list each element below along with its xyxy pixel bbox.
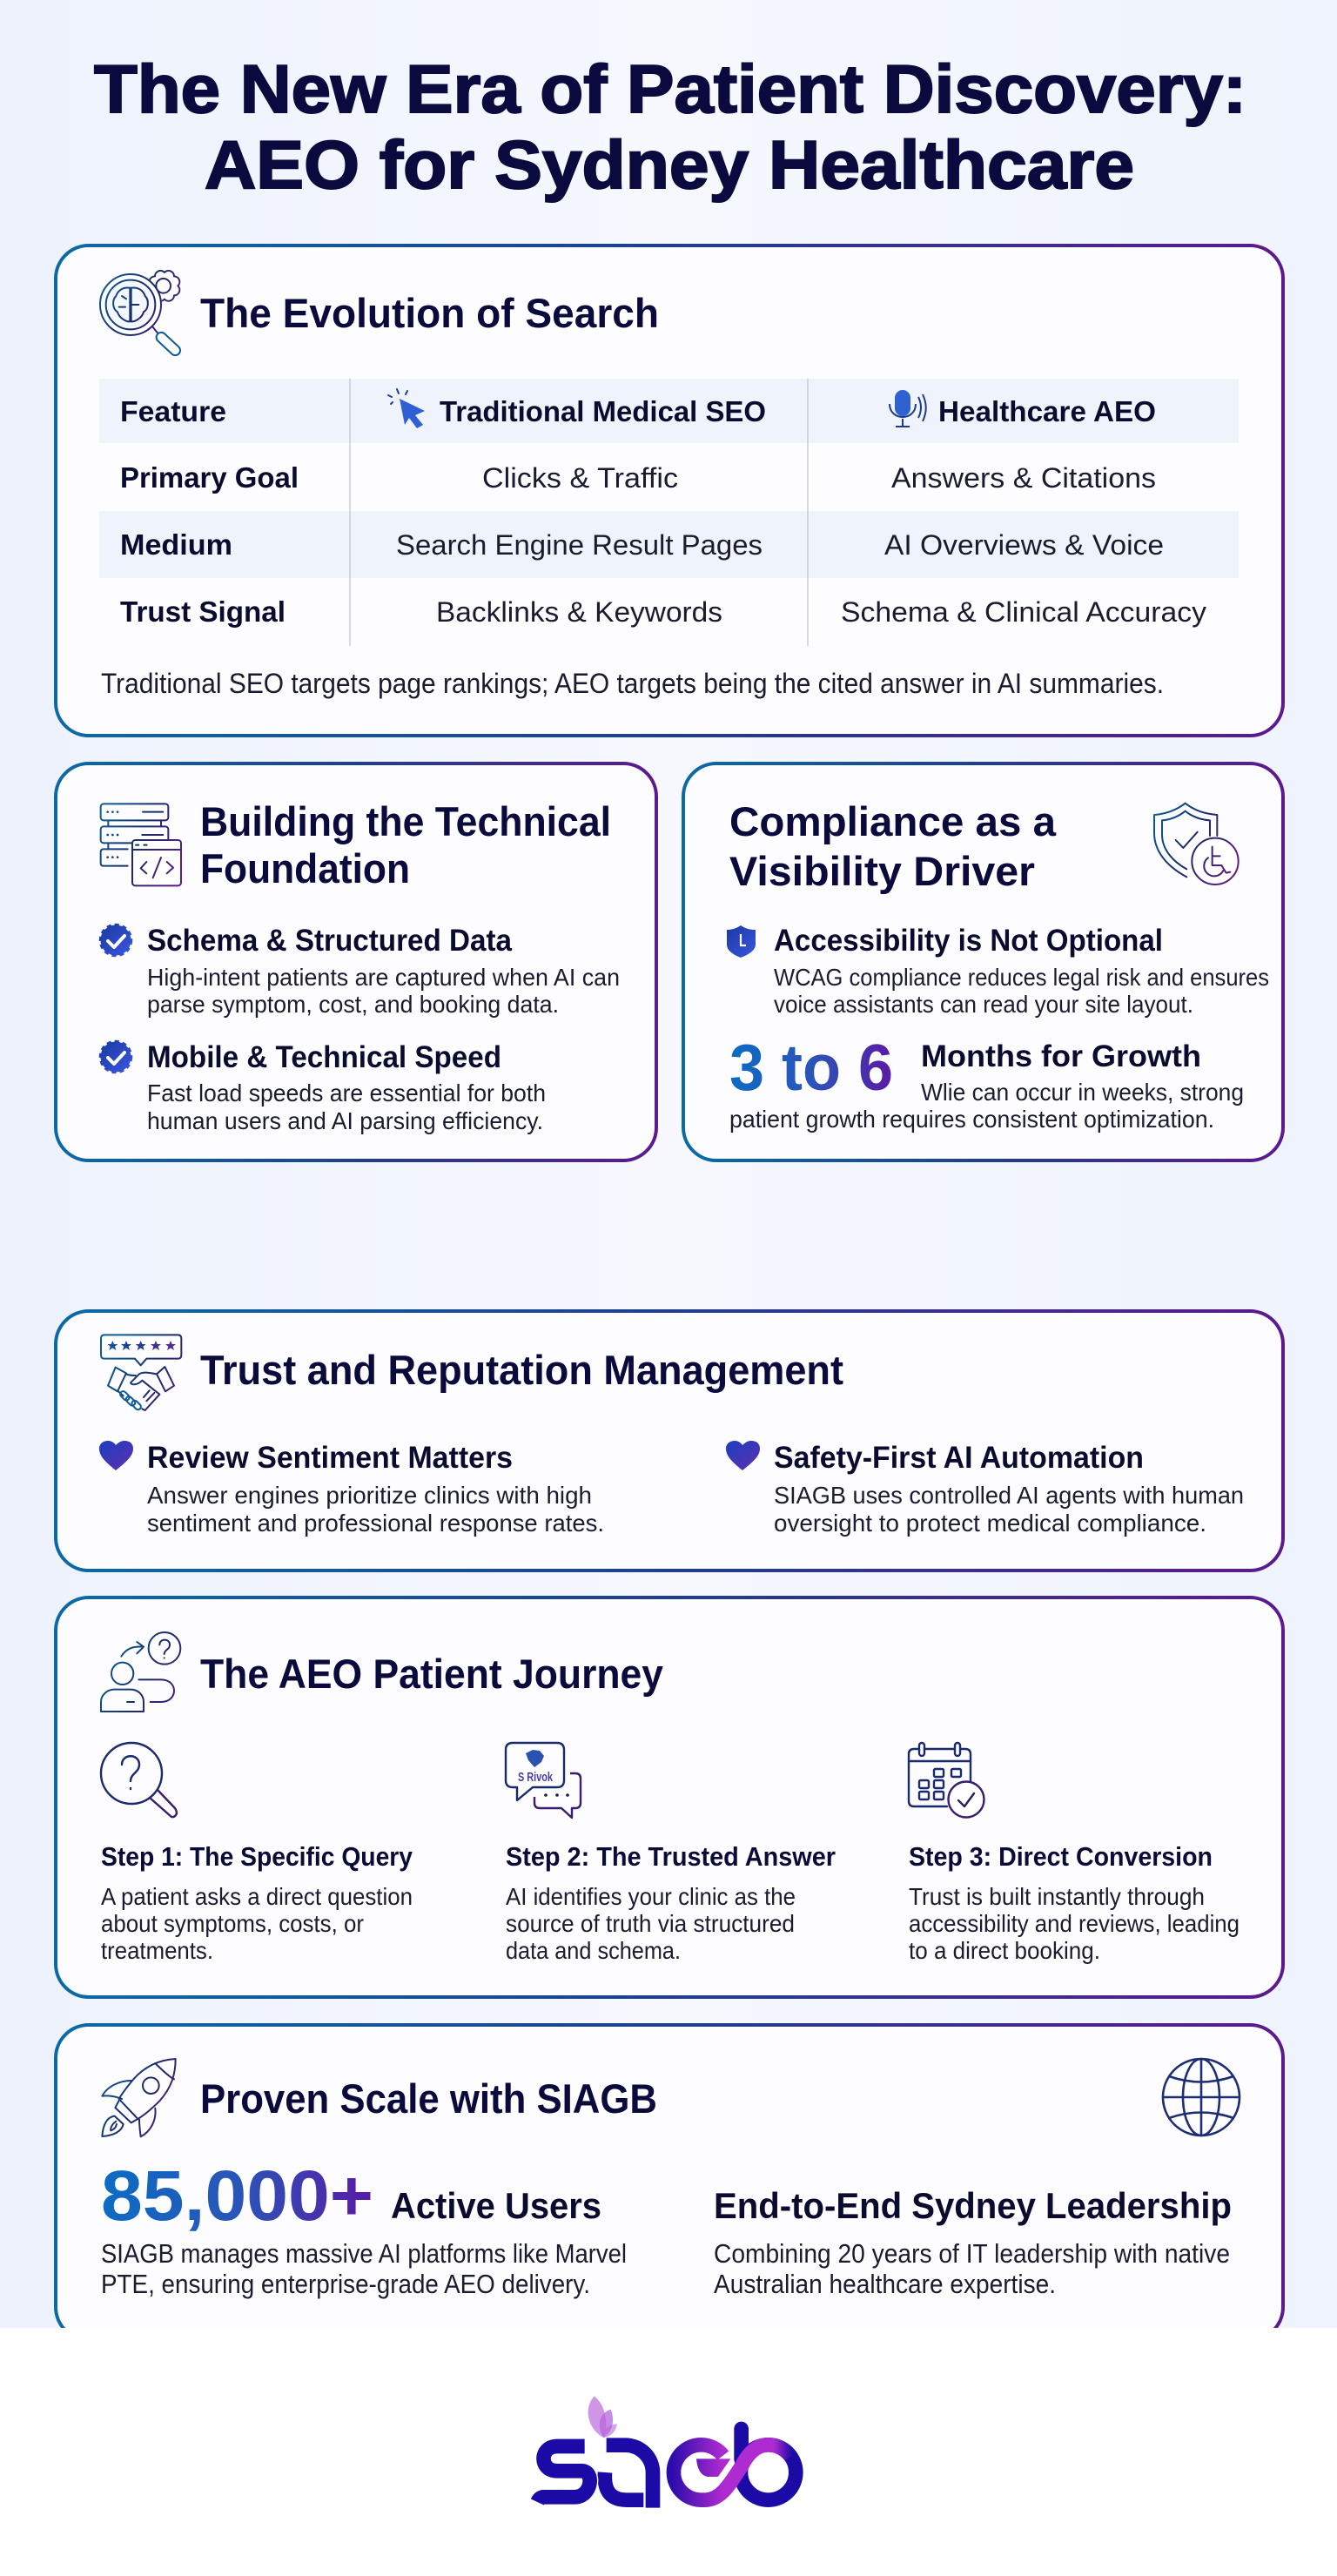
step 2: AI identifies your clinic as the <box>506 1883 796 1910</box>
heading: Foundation <box>200 845 410 891</box>
heading: Building the Technical <box>200 798 611 844</box>
item: review sentiment <box>99 1441 604 1537</box>
item: review sentiment: Answer engines prioritize clinics with high <box>147 1482 592 1509</box>
stat: active users: 85,000+ <box>101 2156 373 2236</box>
header: feature: Feature <box>120 395 226 427</box>
item: end-to-end sydney leadership: Australian healthcare expertise. <box>714 2269 1056 2299</box>
stat: months for growth: Months for Growth <box>921 1039 1201 1073</box>
summary note: Traditional SEO targets page rankings; AEO targets being the cited answer in AI summaries. <box>101 668 1164 699</box>
header: traditional medical seo: Traditional Medical SEO <box>440 395 766 427</box>
icon: check badge <box>101 925 131 956</box>
icon: microphone <box>890 390 926 427</box>
stat: months for growth: 3 to 6 <box>729 1031 893 1104</box>
title: The New Era of Patient Discovery: <box>94 50 1246 127</box>
row: trust signal <box>120 595 1206 628</box>
row: primary goal: Primary Goal <box>120 461 299 494</box>
item: mobile and technical speed: human users and AI parsing efficiency. <box>147 1107 543 1134</box>
heading: Visibility Driver <box>729 848 1035 894</box>
row: medium: AI Overviews & Voice <box>884 529 1164 561</box>
step 3: to a direct booking. <box>909 1937 1100 1964</box>
step 1: Step 1: The Specific Query <box>101 1841 413 1872</box>
item: accessibility: WCAG compliance reduces legal risk and ensures <box>774 964 1269 991</box>
item: accessibility: voice assistants can read your site layout. <box>774 991 1193 1018</box>
item: safety-first ai automation: Safety-First AI Automation <box>774 1441 1144 1475</box>
heading: Trust and Reputation Management <box>200 1347 843 1393</box>
step 2: Step 2: The Trusted Answer <box>506 1841 836 1872</box>
item: schema and structured data <box>101 924 620 1018</box>
panel: the aeo patient journey <box>56 1597 1283 1997</box>
footer band <box>0 2328 1337 2576</box>
icon: magnifier with brain and gear <box>100 271 182 357</box>
row: medium <box>120 528 1164 561</box>
step 3 <box>909 1743 1240 1964</box>
row: primary goal: Clicks & Traffic <box>482 462 678 494</box>
panel: building the technical foundation <box>56 763 656 1160</box>
comparison table <box>99 379 1239 646</box>
step 1: treatments. <box>101 1937 213 1964</box>
panel: compliance as a visibility driver <box>683 763 1283 1160</box>
icon: shield badge <box>727 925 756 958</box>
item: mobile and technical speed: Mobile & Technical Speed <box>147 1040 501 1074</box>
icon: heart <box>99 1441 133 1470</box>
item: mobile and technical speed: Fast load speeds are essential for both <box>147 1079 546 1106</box>
step 2: source of truth via structured <box>506 1910 795 1937</box>
stat: months for growth <box>729 1031 1244 1133</box>
item: safety-first ai automation <box>726 1441 1244 1537</box>
icon: question magnifier <box>101 1743 177 1817</box>
item: end-to-end sydney leadership: End-to-End Sydney Leadership <box>714 2185 1232 2226</box>
item: end-to-end sydney leadership <box>714 2185 1232 2299</box>
heading <box>729 798 1057 894</box>
item: review sentiment: sentiment and professional response rates. <box>147 1510 604 1537</box>
stat: months for growth: Wlie can occur in weeks, strong <box>921 1079 1244 1106</box>
item: review sentiment: Review Sentiment Matters <box>147 1441 513 1475</box>
icon: chat bubbles <box>506 1743 581 1818</box>
row: primary goal <box>120 461 1156 494</box>
stat: months for growth: patient growth requires consistent optimization. <box>729 1106 1214 1133</box>
item: schema and structured data: Schema & Structured Data <box>147 924 512 958</box>
stat: active users: Active Users <box>391 2185 601 2226</box>
row: medium: Medium <box>120 528 232 561</box>
step 2 <box>506 1743 836 1964</box>
row: trust signal: Backlinks & Keywords <box>436 596 722 628</box>
title: AEO for Sydney Healthcare <box>205 126 1134 203</box>
icon: chat bubbles: S Rivok <box>518 1770 553 1785</box>
step 3: accessibility and reviews, leading <box>909 1910 1240 1937</box>
row: medium: Search Engine Result Pages <box>396 529 763 561</box>
item: schema and structured data: parse symptom, cost, and booking data. <box>147 991 559 1018</box>
row: trust signal: Trust Signal <box>120 595 286 628</box>
heading: Proven Scale with SIAGB <box>200 2075 657 2122</box>
icon: servers and code window <box>101 804 181 885</box>
row: trust signal: Schema & Clinical Accuracy <box>841 596 1206 628</box>
icon: heart <box>726 1441 760 1470</box>
icon: calendar with check <box>909 1743 984 1818</box>
icon: stars and handshake <box>101 1335 181 1411</box>
item: schema and structured data: High-intent patients are captured when AI can <box>147 964 620 991</box>
icon: cursor <box>388 389 425 428</box>
step 3: Trust is built instantly through <box>909 1883 1205 1910</box>
row: primary goal: Answers & Citations <box>891 462 1156 494</box>
stat: active users: SIAGB manages massive AI platforms like Marvel <box>101 2238 627 2269</box>
title <box>94 50 1246 203</box>
step 3: Step 3: Direct Conversion <box>909 1841 1213 1872</box>
logo: siagb <box>537 2396 796 2508</box>
heading: The AEO Patient Journey <box>200 1651 663 1697</box>
heading <box>200 798 611 891</box>
icon: globe <box>1163 2059 1240 2135</box>
item: safety-first ai automation: SIAGB uses controlled AI agents with human <box>774 1482 1244 1509</box>
icon: person with question <box>101 1632 180 1712</box>
step 1: about symptoms, costs, or <box>101 1910 364 1937</box>
heading: Compliance as a <box>729 798 1057 844</box>
header: healthcare aeo: Healthcare AEO <box>938 395 1156 427</box>
step 2: data and schema. <box>506 1937 681 1964</box>
icon: shield with wheelchair <box>1154 804 1239 884</box>
step 1 <box>101 1743 413 1964</box>
item: safety-first ai automation: oversight to protect medical compliance. <box>774 1510 1206 1537</box>
item: accessibility: Accessibility is Not Optional <box>774 924 1163 958</box>
stat: active users: PTE, ensuring enterprise-grade AEO delivery. <box>101 2269 590 2299</box>
item: accessibility <box>727 924 1269 1018</box>
icon: check badge <box>101 1041 131 1073</box>
step 1: A patient asks a direct question <box>101 1883 413 1910</box>
icon: rocket <box>102 2059 176 2136</box>
panel: trust and reputation management <box>56 1311 1283 1570</box>
panel: proven scale with siagb <box>56 2025 1283 2340</box>
heading: The Evolution of Search <box>200 290 659 336</box>
stat: active users <box>101 2156 627 2299</box>
item: end-to-end sydney leadership: Combining 20 years of IT leadership with native <box>714 2238 1230 2269</box>
item: mobile and technical speed <box>101 1040 546 1134</box>
panel: the evolution of search <box>56 245 1283 736</box>
